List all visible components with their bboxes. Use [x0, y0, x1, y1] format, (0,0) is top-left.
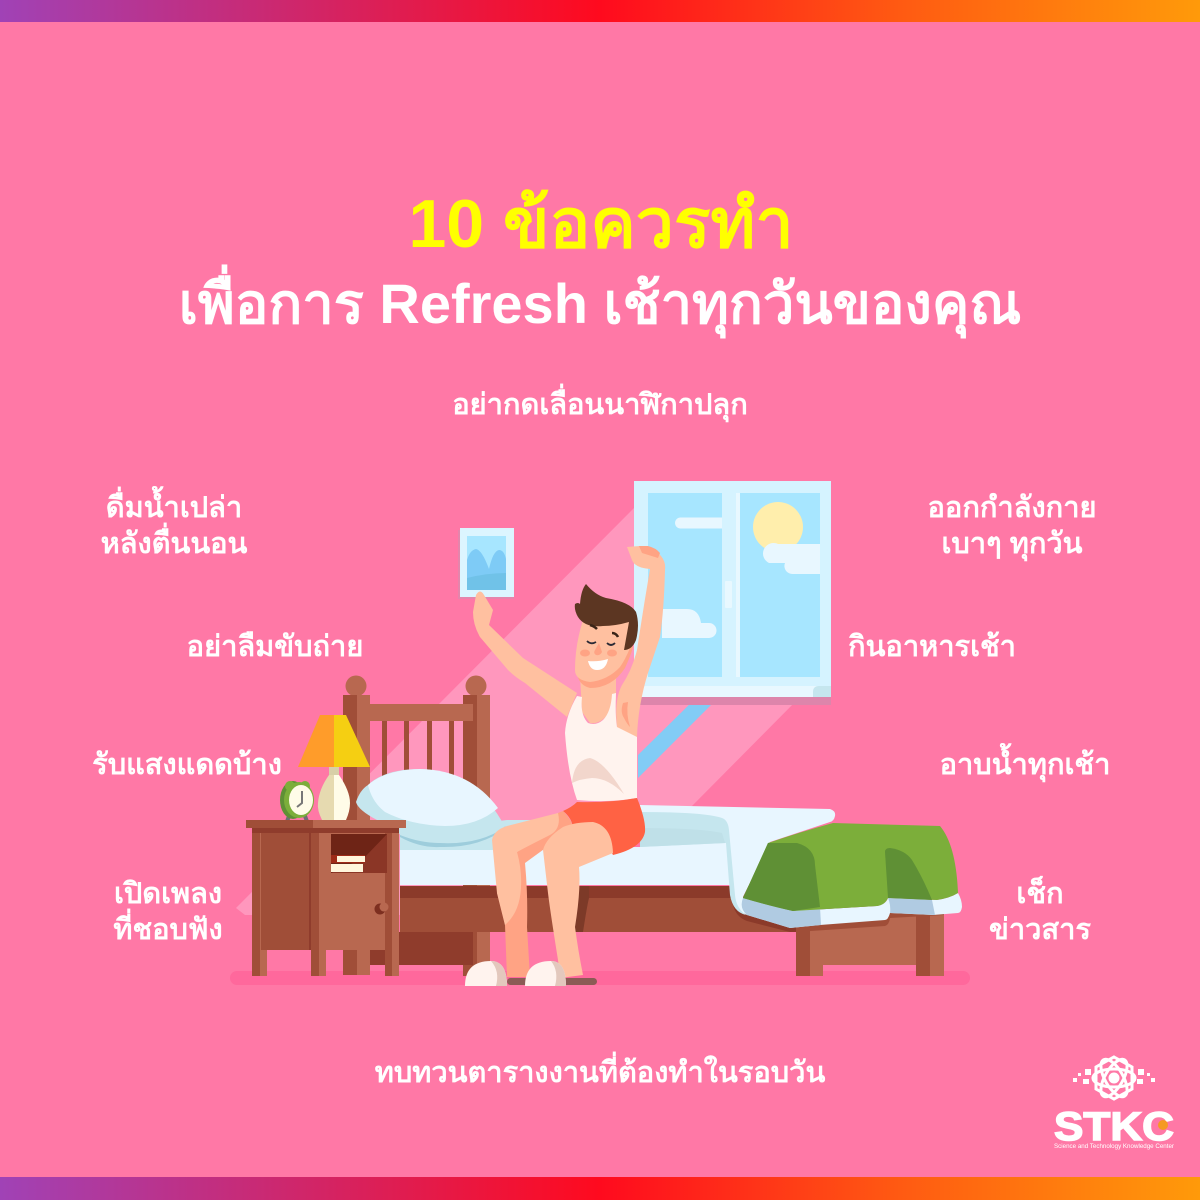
- tip: drink water: [101, 485, 248, 560]
- nightstand: [246, 820, 406, 976]
- bed shadow from leg: [574, 886, 589, 932]
- tip: drink water: ดื่มน้ำเปล่า: [106, 485, 242, 524]
- tip: exercise: เบาๆ ทุกวัน: [941, 528, 1083, 561]
- lamp: [298, 715, 370, 820]
- tip: bottom: ทบทวนตารางงานที่ต้องทำในรอบวัน: [375, 1051, 825, 1089]
- raised arm left: [473, 592, 577, 717]
- title: เพื่อการ Refresh เช้าทุกวันของคุณ: [179, 264, 1021, 339]
- bed frame: [370, 886, 944, 976]
- leg far: [492, 811, 573, 977]
- tip: exercise: [927, 492, 1097, 561]
- top gradient bar: [0, 0, 1200, 22]
- pillow: [356, 769, 506, 847]
- shorts: [563, 798, 645, 855]
- tip: top: อย่ากดเลื่อนนาฬิกาปลุก: [452, 383, 748, 422]
- tip: music: เปิดเพลง: [114, 878, 222, 910]
- foot of bed: [796, 915, 944, 976]
- tip: sunlight: รับแสงแดดบ้าง: [92, 749, 282, 781]
- title: 10 ข้อควรทำ: [408, 186, 794, 262]
- tip: toilet: อย่าลืมขับถ่าย: [187, 631, 363, 663]
- blue light stripe: [638, 697, 719, 778]
- tip: breakfast: กินอาหารเช้า: [848, 631, 1016, 663]
- blanket: [742, 823, 962, 928]
- hair: [575, 584, 638, 650]
- tank top: [565, 693, 637, 801]
- illustration: bedroom scene: [230, 481, 970, 986]
- bottom gradient bar: [0, 1177, 1200, 1200]
- wall picture: [458, 528, 514, 599]
- tip: music: [113, 878, 223, 946]
- head: [577, 640, 633, 688]
- logo tagline: Science and Technology Knowledge Center: [1054, 1144, 1174, 1150]
- slippers: [465, 961, 597, 986]
- bed headboard: [343, 676, 490, 976]
- logo atom emblem: [1093, 1055, 1135, 1101]
- window: [634, 481, 831, 705]
- tip: music: ที่ชอบฟัง: [113, 908, 223, 946]
- tip: news: ข่าวสาร: [989, 914, 1091, 946]
- tip: drink water: หลังตื่นนอน: [101, 522, 248, 560]
- tip: news: เช็ก: [1016, 875, 1064, 910]
- title: [179, 186, 1021, 339]
- tip: shower: อาบน้ำทุกเช้า: [940, 742, 1110, 782]
- ground shadow: [230, 971, 970, 985]
- face features: [580, 625, 618, 670]
- raised arm right: [616, 546, 665, 737]
- shelf niche: [331, 834, 387, 873]
- logo: STKC: [1054, 1055, 1174, 1150]
- light beam: [236, 508, 800, 915]
- drawer knob: [374, 904, 386, 914]
- logo wordmark: STKC: [1054, 1105, 1174, 1149]
- tip: exercise: ออกกำลังกาย: [927, 492, 1097, 524]
- man: [465, 546, 665, 986]
- alarm clock: [280, 781, 314, 821]
- leg near: [543, 822, 613, 978]
- neck: [580, 676, 616, 723]
- tip: news: [989, 875, 1091, 946]
- mattress and sheet: [400, 805, 835, 915]
